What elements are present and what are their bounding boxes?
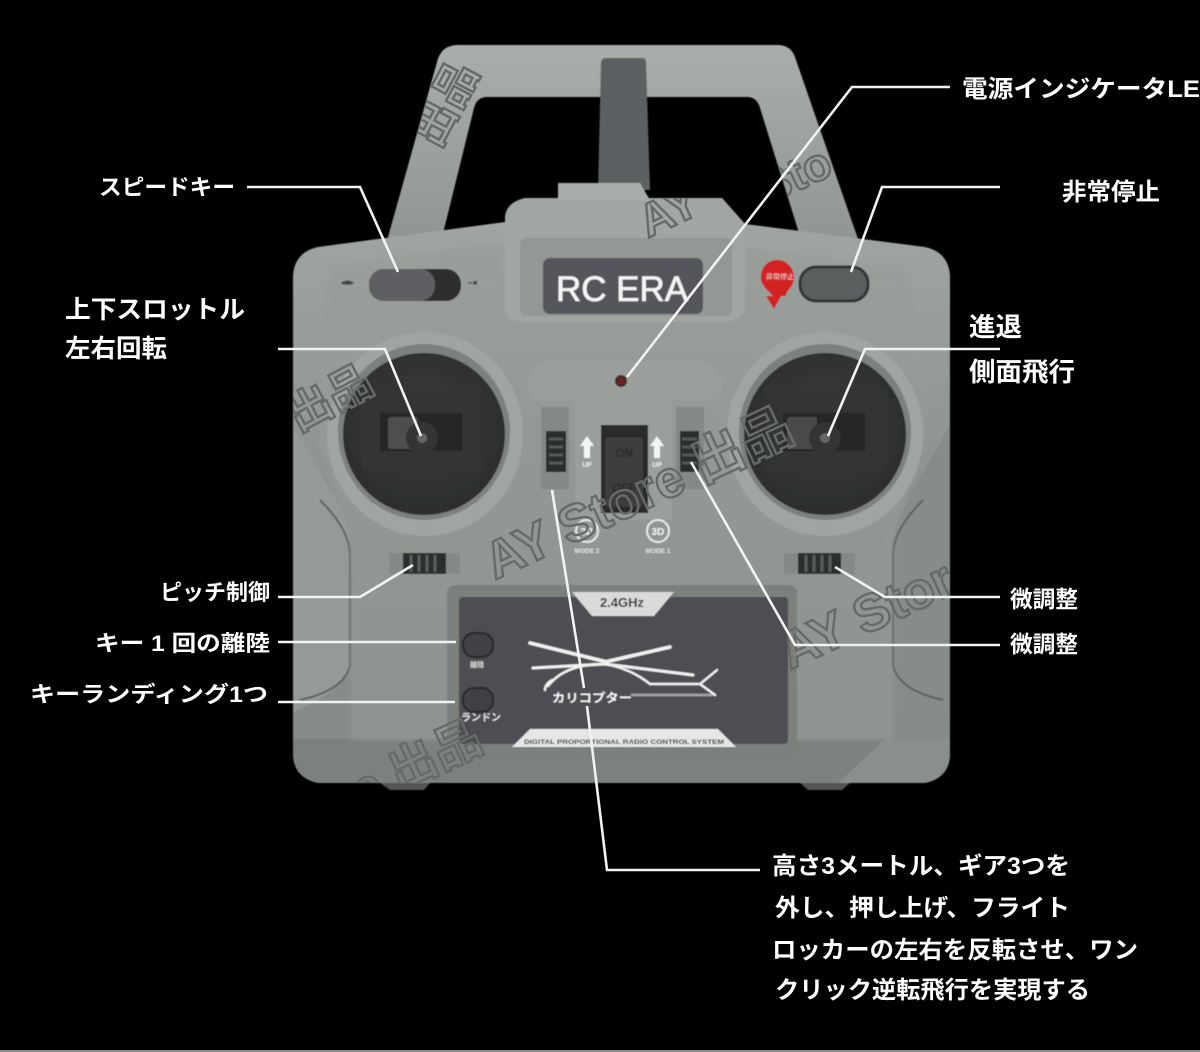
logo plinth xyxy=(505,198,745,322)
takeoff button xyxy=(463,633,493,669)
emergency stop button xyxy=(800,267,868,301)
label: emergency stop: 非常停止 xyxy=(1062,179,1160,206)
watermarks: AY Store 出品 xyxy=(476,398,801,591)
carrying handle xyxy=(381,45,866,262)
UP arrow right: UP xyxy=(652,462,662,469)
label: pitch control: ピッチ制御 xyxy=(160,580,270,605)
speed key switch xyxy=(340,269,477,301)
antenna base xyxy=(558,183,650,200)
watermarks: Store xyxy=(750,117,879,214)
landing button: ランドン xyxy=(461,712,501,724)
2.4GHz tab: 2.4GHz xyxy=(600,595,645,610)
display panel xyxy=(447,585,797,756)
lower right bevel xyxy=(838,739,950,783)
watermarks: 出品 xyxy=(280,356,380,441)
logo inset xyxy=(520,238,732,316)
UP arrow left xyxy=(580,436,594,469)
landing button xyxy=(461,688,501,724)
label: one key takeoff: キー 1 回の離陸 xyxy=(95,631,270,656)
label: height and flip description: 外し、押し上げ、フライト xyxy=(775,895,1070,922)
mode 2 icon: 3D xyxy=(581,527,593,538)
label: power indicator: 電源インジケータLE xyxy=(962,76,1200,103)
label: forward back and side flight: 側面飛行 xyxy=(969,357,1075,387)
power switch xyxy=(601,425,648,513)
label: fine adjust 2: 微調整 xyxy=(1010,631,1078,657)
power switch: OFF xyxy=(612,481,636,495)
centre panel xyxy=(526,361,725,520)
mode 1 icon: MODE 1 xyxy=(646,548,671,555)
RC ERA logo: RC ERA xyxy=(556,270,689,309)
label: height and flip description: 高さ3メートル、ギア3つを xyxy=(772,853,1070,880)
left horizontal trim xyxy=(389,553,460,574)
watermarks: AY xyxy=(630,175,706,247)
power switch: ON xyxy=(615,446,633,460)
emergency stop icon xyxy=(761,260,794,309)
mode 2 icon xyxy=(575,520,600,555)
left grip panel xyxy=(293,425,350,712)
label: height and flip description: クリック逆転飛行を実現する xyxy=(775,977,1090,1004)
UP arrow left: UP xyxy=(582,462,592,469)
left vertical trim xyxy=(541,407,569,489)
left stick gimbal xyxy=(327,332,523,536)
bottom system strip xyxy=(512,729,736,747)
right stick gimbal xyxy=(727,332,923,536)
label: forward back and side flight xyxy=(969,312,1075,387)
leader lines xyxy=(247,87,1000,870)
label: throttle and rotation: 左右回転 xyxy=(65,335,167,363)
speed key switch: ▪▪■ xyxy=(468,280,477,287)
label: forward back and side flight: 進退 xyxy=(969,312,1022,342)
takeoff button: 離陸 xyxy=(470,660,484,669)
speed key switch: ◂■▸ xyxy=(340,278,355,287)
top face inset xyxy=(318,242,925,740)
antenna xyxy=(598,58,650,190)
label: one key landing: キーランディング1つ xyxy=(30,682,268,707)
watermarks: AY Store xyxy=(771,538,989,681)
mode 1 icon xyxy=(646,520,671,555)
label: throttle and rotation xyxy=(65,296,245,363)
side grip outlines xyxy=(300,500,943,700)
2.4GHz tab xyxy=(572,592,674,616)
bottom system strip: DIGITAL PROPORTIONAL RADIO CONTROL SYSTEM xyxy=(524,739,724,746)
helicopter label: カリコプター xyxy=(552,691,632,705)
UP arrow right xyxy=(650,436,664,469)
label: throttle and rotation: 上下スロットル xyxy=(65,296,245,324)
label: height and flip description xyxy=(772,853,1138,1004)
right grip panel xyxy=(893,425,950,712)
helicopter graphic xyxy=(530,643,717,695)
watermarks: 出品 xyxy=(404,54,488,155)
watermarks xyxy=(294,62,950,783)
body feet xyxy=(380,783,850,790)
right vertical trim xyxy=(676,407,704,489)
controller body xyxy=(293,198,950,783)
lower body band xyxy=(293,739,950,783)
power LED xyxy=(616,376,626,386)
emergency stop icon: 非常停止 xyxy=(766,272,794,281)
label: height and flip description: ロッカーの左右を反転させ、ワン xyxy=(772,937,1138,964)
mode 2 icon: MODE 2 xyxy=(575,548,600,555)
transmitter illustration xyxy=(293,45,950,790)
label: fine adjust 1: 微調整 xyxy=(1010,586,1078,612)
watermarks: re 出品 xyxy=(327,712,490,825)
mode 1 icon: 3D xyxy=(652,527,664,538)
RC ERA logo xyxy=(543,258,703,314)
right horizontal trim xyxy=(784,553,855,574)
label: speed key: スピードキー xyxy=(99,175,235,200)
